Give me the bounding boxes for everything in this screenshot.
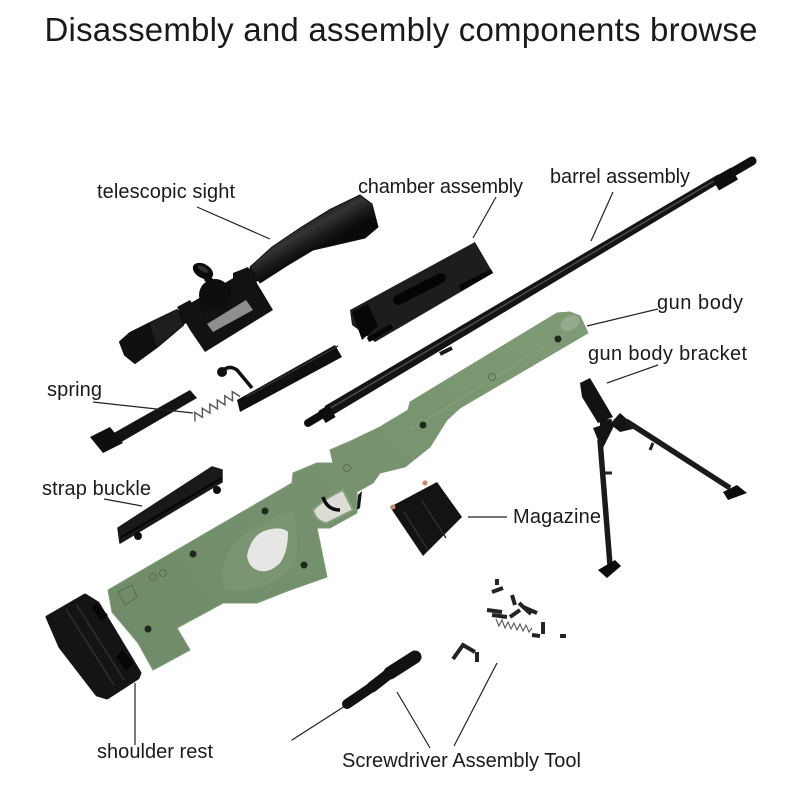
part: gun body bracket	[580, 378, 747, 578]
label: chamber assembly: chamber assembly	[358, 176, 523, 198]
part: plunger rod	[90, 390, 197, 453]
part: telescopic sight	[120, 195, 378, 363]
part: shoulder rest	[47, 595, 140, 698]
part: screwdriver	[292, 657, 415, 740]
part: chamber assembly	[350, 242, 493, 342]
label: telescopic sight: telescopic sight	[97, 181, 235, 203]
label: gun body: gun body	[657, 292, 743, 314]
part: screws	[453, 579, 566, 662]
label: magazine: Magazine	[513, 506, 601, 528]
part: strap buckle	[118, 467, 222, 543]
label: screwdriver assembly tool: Screwdriver Assembly Tool	[342, 750, 581, 772]
label: shoulder rest: shoulder rest	[97, 741, 213, 763]
label: barrel assembly: barrel assembly	[550, 166, 690, 188]
label: strap buckle: strap buckle	[42, 478, 151, 500]
label lines	[93, 192, 658, 748]
title: Disassembly and assembly components browse	[44, 11, 758, 48]
label: gun body bracket: gun body bracket	[588, 343, 747, 365]
part: gun body	[108, 312, 588, 670]
part: barrel	[308, 161, 752, 423]
part: spring	[195, 392, 240, 422]
part: bolt	[217, 345, 342, 412]
part: magazine	[390, 480, 462, 556]
label: spring: spring	[47, 379, 102, 401]
